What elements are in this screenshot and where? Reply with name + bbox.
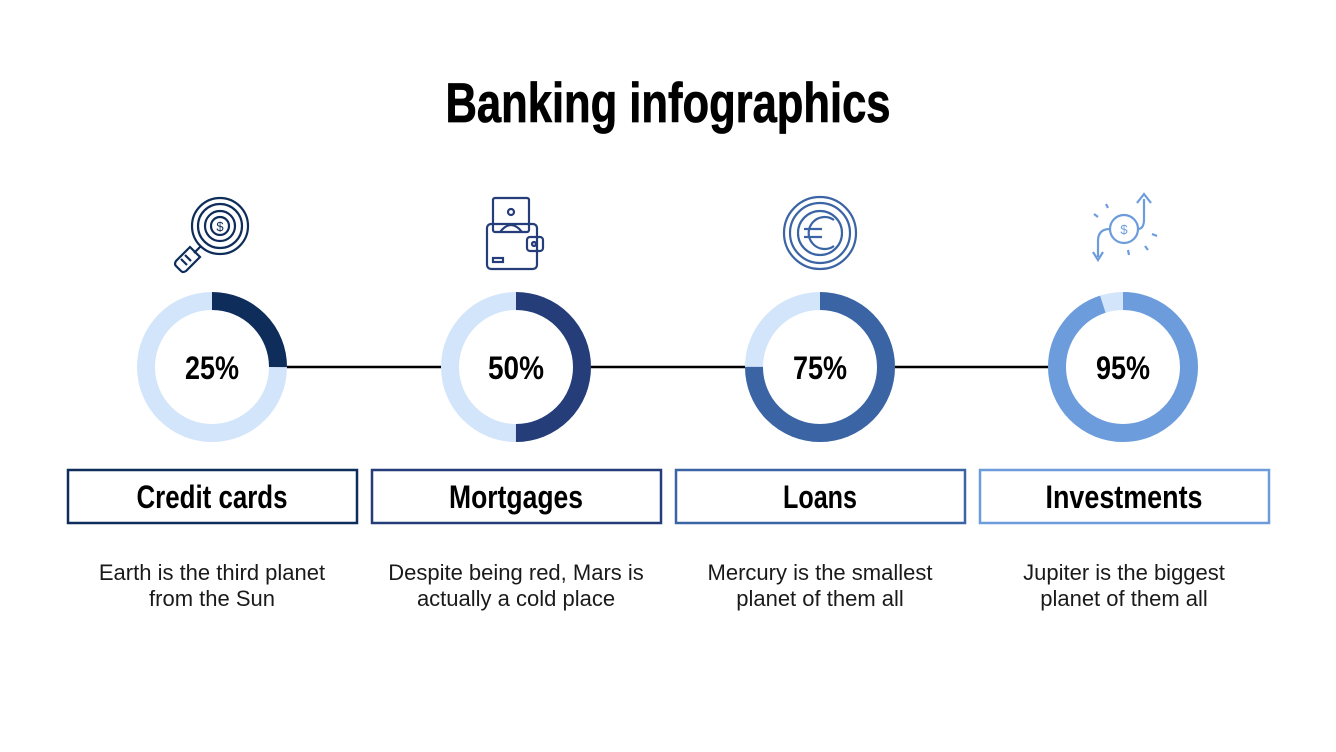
label box: Loans	[783, 479, 857, 515]
label box: Mortgages	[449, 479, 583, 515]
description: from the Sun	[149, 586, 275, 611]
donut 75%	[754, 301, 886, 433]
connector lines	[287, 366, 1048, 368]
description: Earth is the third planet	[99, 560, 325, 585]
description: planet of them all	[736, 586, 904, 611]
label box	[980, 470, 1269, 523]
label box: Credit cards	[136, 479, 288, 515]
value 50%: 50%	[488, 350, 544, 386]
icon: exchange dollar	[1093, 194, 1157, 260]
donut 25%	[146, 301, 278, 433]
description: Despite being red, Mars is	[388, 560, 644, 585]
description: Mercury is the smallest	[708, 560, 932, 585]
panel: mortgages	[372, 198, 661, 611]
description: planet of them all	[1040, 586, 1208, 611]
label box	[372, 470, 661, 523]
icon: magnifier dollar	[175, 198, 248, 272]
icon: euro coin	[784, 197, 856, 269]
label box	[68, 470, 357, 523]
value 75%: 75%	[793, 350, 847, 386]
icon: exchange dollar: $	[1120, 222, 1128, 237]
icon: magnifier dollar: $	[216, 219, 224, 234]
value 95%: 95%	[1096, 350, 1150, 386]
label box	[676, 470, 965, 523]
icon: wallet	[487, 198, 543, 269]
donut 50%	[450, 301, 582, 433]
description: Jupiter is the biggest	[1023, 560, 1225, 585]
panel: investments	[980, 194, 1269, 611]
donut 95%	[1057, 301, 1189, 433]
title: Banking infographics	[446, 71, 890, 134]
panel: loans	[676, 197, 965, 611]
description: actually a cold place	[417, 586, 615, 611]
value 25%: 25%	[185, 350, 239, 386]
panel: credit cards	[68, 198, 357, 611]
label box: Investments	[1046, 479, 1202, 515]
